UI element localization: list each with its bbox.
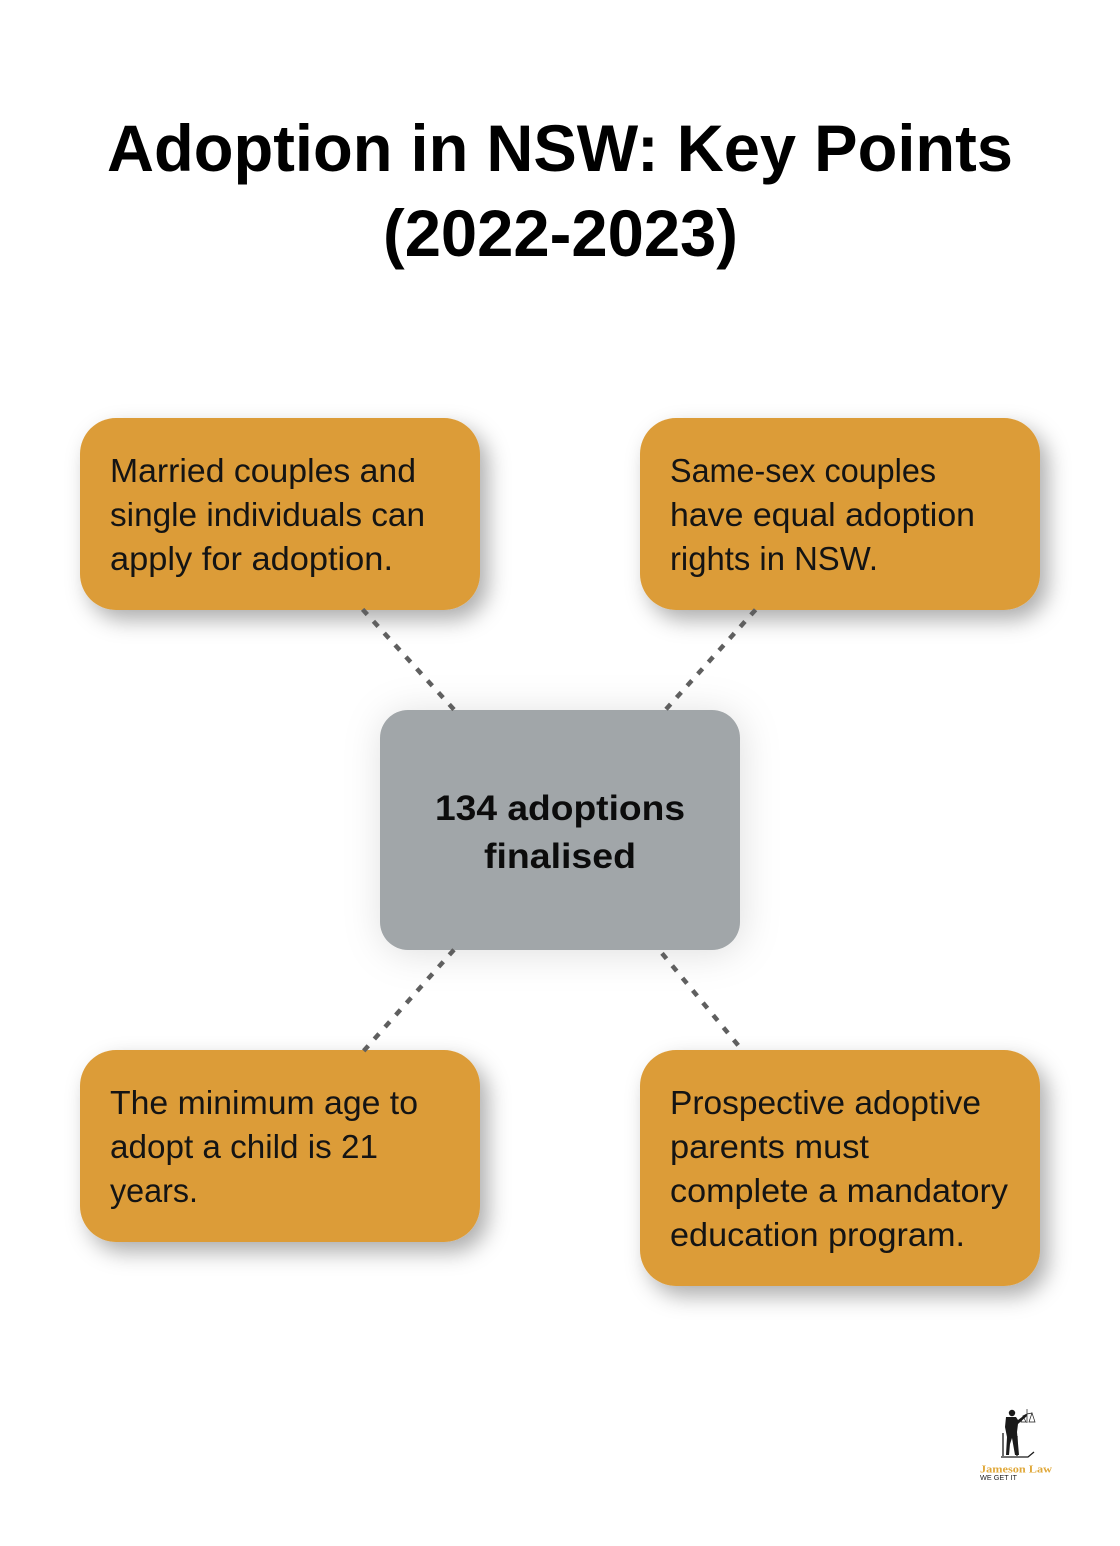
icon: lady justice: [1001, 1409, 1035, 1457]
panel: education program: parents must: [670, 1128, 869, 1165]
panel: same-sex couples: [640, 418, 1040, 610]
title: [107, 111, 1013, 270]
panel: minimum age: The minimum age to: [110, 1084, 418, 1121]
panel: minimum age: [80, 1050, 480, 1242]
panel: 134 adoptions finalised: finalised: [484, 837, 636, 876]
panel: 134 adoptions finalised: 134 adoptions: [435, 789, 685, 828]
panel: married couples and single individuals: apply for adoption.: [110, 540, 393, 577]
panel: education program: education program.: [670, 1216, 965, 1253]
logo: Jameson Law: [980, 1409, 1052, 1482]
panel: education program: Prospective adoptive: [670, 1084, 981, 1121]
panel: married couples and single individuals: Married couples and: [110, 452, 416, 489]
title: Adoption in NSW: Key Points: [107, 111, 1013, 185]
panel: same-sex couples: rights in NSW.: [670, 540, 878, 577]
panel: married couples and single individuals: single individuals can: [110, 496, 425, 533]
panel: 134 adoptions finalised: [380, 710, 740, 950]
panel: education program: complete a mandatory: [670, 1172, 1009, 1209]
panel: married couples and single individuals: [80, 418, 480, 610]
panel: minimum age: years.: [110, 1172, 198, 1209]
panel: same-sex couples: have equal adoption: [670, 496, 975, 533]
logo tagline: WE GET IT: [980, 1475, 1018, 1482]
logo wordmark: Jameson Law: [980, 1464, 1052, 1476]
title: (2022-2023): [383, 196, 738, 270]
panel: same-sex couples: Same-sex couples: [670, 452, 936, 489]
panel: education program: [640, 1050, 1040, 1286]
panel: minimum age: adopt a child is 21: [110, 1128, 378, 1165]
dashed connectors: [363, 609, 756, 1051]
